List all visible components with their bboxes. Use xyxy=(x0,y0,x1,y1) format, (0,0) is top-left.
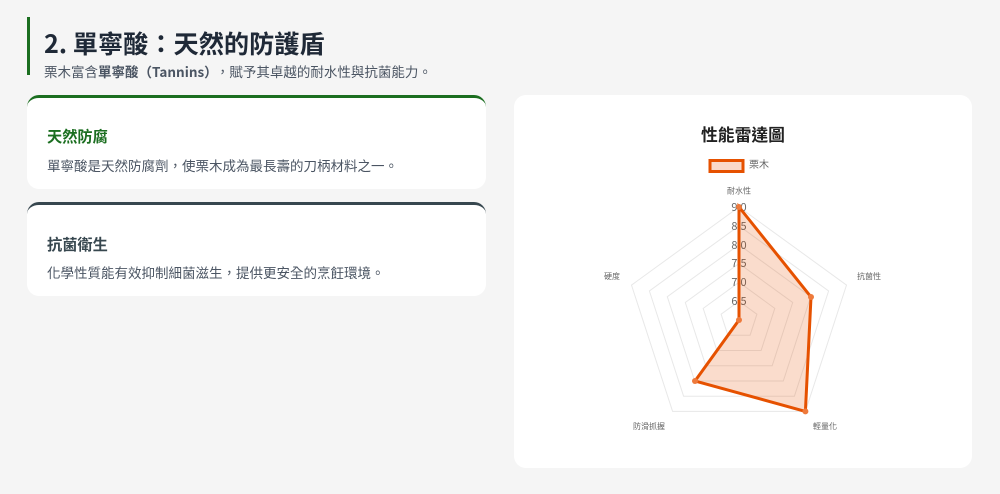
data series: chestnut xyxy=(692,204,814,414)
card heading: antibacterial hygiene: 抗菌衛生 xyxy=(47,233,108,255)
panel: antibacterial hygiene card xyxy=(27,202,486,296)
axis labels: 抗菌性 xyxy=(857,271,881,282)
axis labels: 硬度 xyxy=(604,271,620,282)
panel: natural preservative card xyxy=(27,95,486,189)
axis tick labels: 7.0 xyxy=(731,274,747,290)
card text: natural preservative: 單寧酸是天然防腐劑，使栗木成為最長壽的刀柄材料之一。 xyxy=(47,155,398,175)
radar grid xyxy=(632,207,846,411)
legend: 栗木 xyxy=(749,156,769,171)
chart title: 性能雷達圖 xyxy=(701,122,785,146)
subtitle: 栗木富含單寧酸（Tannins） ，賦予其卓越的耐水性與抗菌能力。 xyxy=(44,61,432,81)
card text: antibacterial hygiene: 化學性質能有效抑制細菌滋生，提供更安全的烹飪環境。 xyxy=(47,262,384,282)
axis tick labels: 6.5 xyxy=(731,293,747,309)
header: title block xyxy=(27,17,467,75)
axis labels: 耐水性 xyxy=(727,186,751,196)
axis tick labels: 8.0 xyxy=(731,237,747,253)
axis tick labels: 7.5 xyxy=(731,255,747,271)
card heading: natural preservative: 天然防腐 xyxy=(47,125,108,147)
axis labels xyxy=(604,186,881,432)
axis labels: 防滑抓握 xyxy=(633,421,665,432)
axis tick labels: 8.5 xyxy=(731,218,747,234)
legend xyxy=(710,156,769,172)
axis labels: 輕量化 xyxy=(813,421,837,432)
axis tick labels: 9.0 xyxy=(731,199,747,215)
axis tick labels xyxy=(731,199,747,309)
title: 2. 單寧酸：天然的防護盾 xyxy=(44,25,325,61)
panel: radar chart card xyxy=(514,95,972,468)
